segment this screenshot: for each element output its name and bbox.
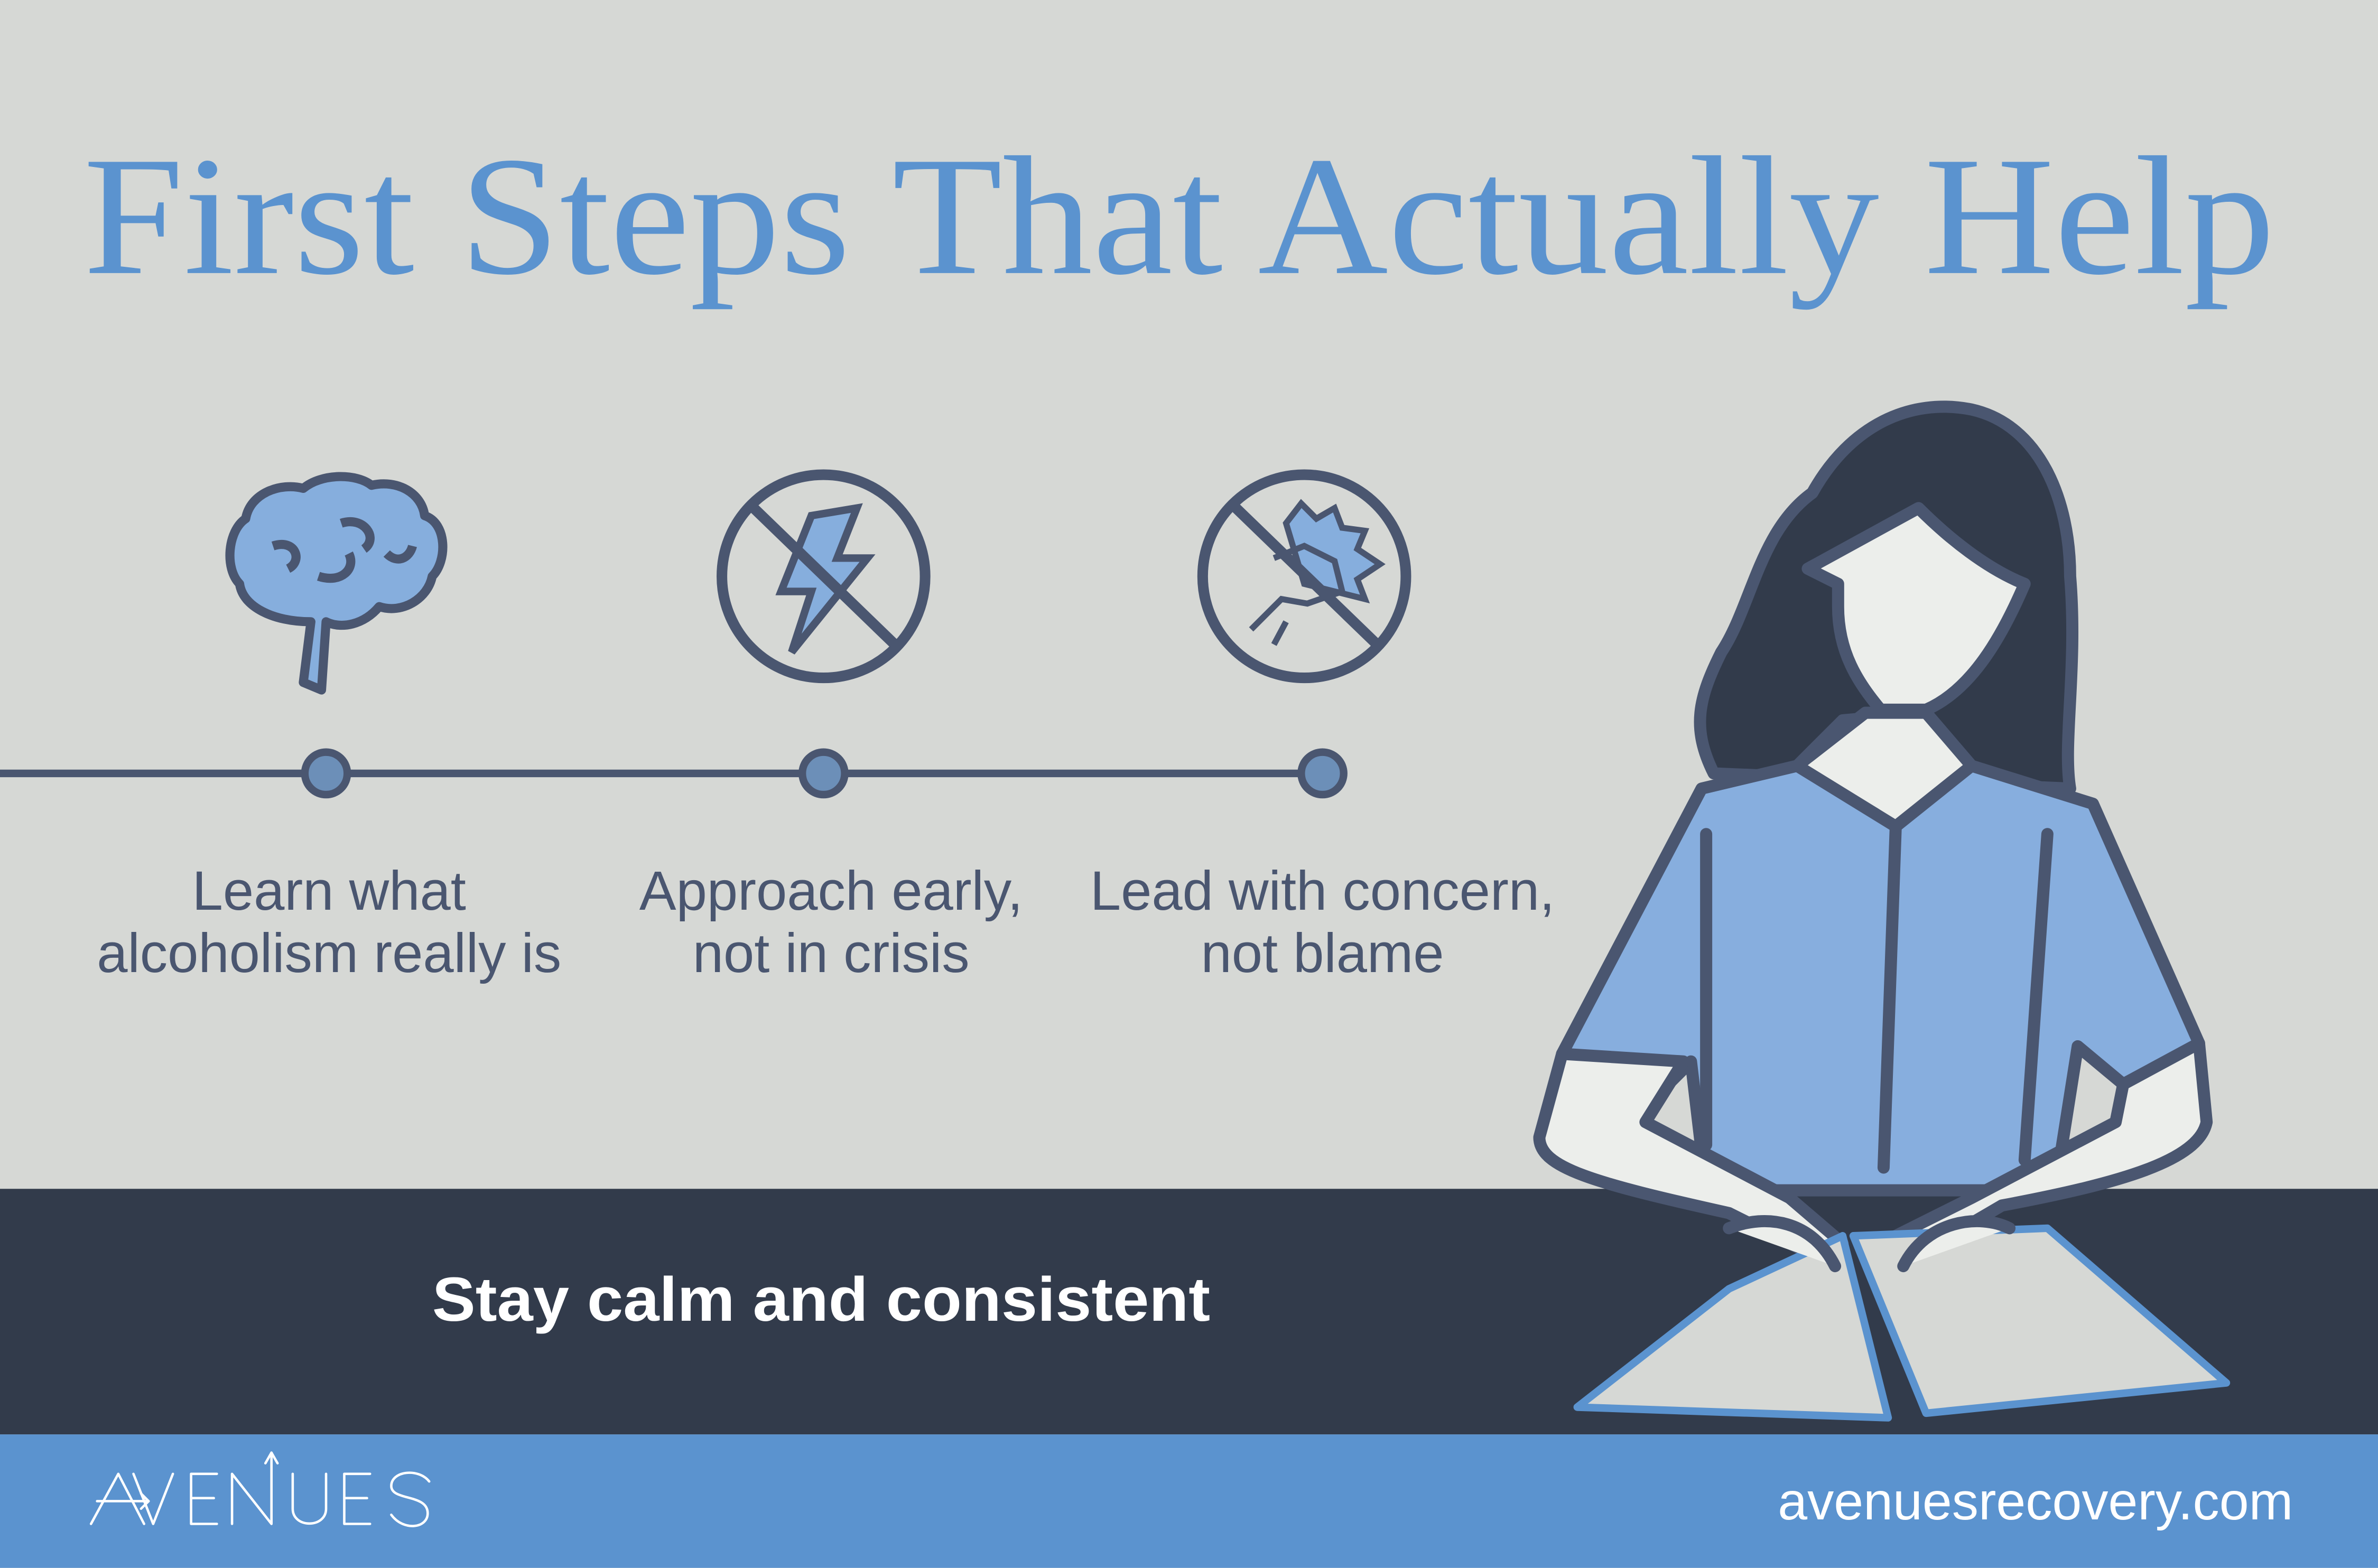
labels — [97, 860, 1555, 984]
illustration: woman — [1539, 407, 2226, 1418]
dark band — [0, 1189, 2378, 1434]
label 3: Lead with concern, — [1090, 860, 1555, 922]
timeline — [0, 752, 1344, 795]
label 1: Learn what — [192, 860, 466, 922]
title: First Steps That Actually Help — [83, 122, 2275, 310]
icon: no lightning — [722, 475, 925, 678]
icon: no fist — [1203, 475, 1406, 678]
logo — [91, 1453, 429, 1526]
icon: brain — [230, 477, 443, 690]
label 2: not in crisis — [693, 922, 970, 984]
footer bar — [0, 1434, 2378, 1568]
label 3: not blame — [1201, 922, 1444, 984]
label 2: Approach early, — [639, 860, 1023, 922]
label 1: alcoholism really is — [97, 922, 561, 984]
url: avenuesrecovery.com — [1778, 1472, 2293, 1531]
band text: Stay calm and consistent — [432, 1264, 1210, 1334]
